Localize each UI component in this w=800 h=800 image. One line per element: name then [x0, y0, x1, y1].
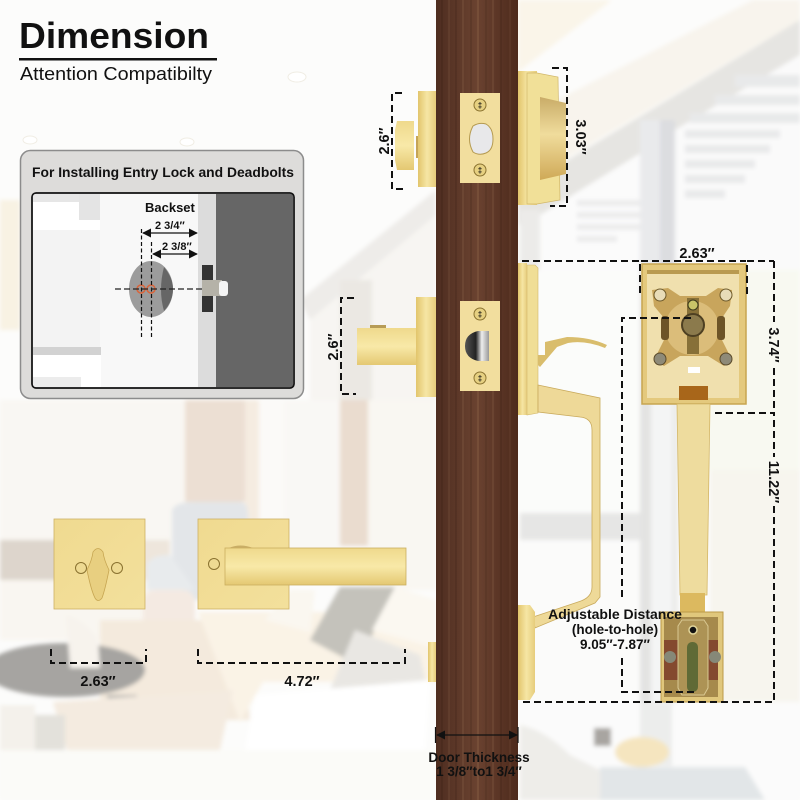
ceiling details: [288, 72, 306, 82]
adjustable distance label: (hole-to-hole): [572, 622, 658, 637]
subtitle: Attention Compatibilty: [20, 64, 212, 84]
dimension: 2 3/8: [152, 241, 197, 339]
handleset side view: [428, 263, 607, 700]
dimension: 3.74: 3.74″: [765, 327, 781, 363]
square deadbolt thumbturn front view: [54, 519, 145, 609]
dimension: thumbturn width: [51, 649, 146, 690]
dimension: 2 3/4: 2 3/4″: [155, 220, 185, 232]
backset label: Backset: [145, 200, 196, 215]
adjustable distance label: Adjustable Distance: [548, 606, 682, 622]
handleset front trim: back of plate: [642, 264, 746, 404]
strike plate top: ‡: [478, 166, 482, 175]
dimension: 3.03: [550, 68, 588, 206]
adjustable distance label: 9.05″-7.87″: [580, 637, 651, 652]
panel heading: For Installing Entry Lock and Deadbolts: [32, 165, 294, 180]
lower mounting plate: [661, 612, 723, 702]
dimension: 3.03: 3.03″: [572, 119, 588, 155]
handle bar: [677, 404, 710, 613]
dimension: door thickness: 1 3/8″to1 3/4″: [436, 764, 522, 779]
adjustable distance label: [548, 606, 682, 652]
lever side view: [357, 297, 436, 397]
dimension: lever length: [198, 649, 405, 690]
dimension: thumbturn width: 2.63″: [80, 674, 116, 690]
dimension: 2.63 trim width: 2.63″: [679, 246, 715, 262]
bore hole: [129, 261, 173, 317]
dimension: 2 3/4: [142, 220, 197, 338]
dimension: lever length: 4.72″: [284, 674, 320, 690]
door edge: wood: [436, 0, 518, 800]
dimension: 11.22: 11.22″: [765, 461, 781, 503]
dimension: door thickness: [428, 727, 530, 779]
dimension: lever 2.6: [326, 298, 356, 394]
latch plate: [460, 301, 500, 391]
strike plate top: ‡: [478, 101, 482, 110]
latch plate: ‡: [478, 374, 482, 383]
dimension: adjustable hole distance: [622, 318, 698, 692]
dimension: 11.22: [520, 413, 781, 702]
center line: [115, 288, 202, 290]
square lever front view: [198, 519, 406, 609]
deadbolt exterior cylinder: [518, 71, 566, 205]
title: Dimension: [19, 15, 209, 56]
dimension: 2 3/8: 2 3/8″: [162, 241, 192, 253]
latch: [202, 265, 228, 312]
dimension: deadbolt 2.6: 2.6″: [377, 127, 393, 155]
panel: backset installation: [20, 150, 304, 398]
deadbolt side view: interior thumbturn: [395, 91, 436, 187]
title underline: [19, 58, 217, 60]
door illustration: [32, 193, 294, 388]
dimension: door thickness: Door Thickness: [428, 750, 530, 765]
dimension: 2.63 trim width: [522, 246, 774, 294]
dimension: deadbolt 2.6: [377, 93, 404, 189]
latch plate: ‡: [478, 310, 482, 319]
strike plate top: [460, 93, 500, 183]
dimension: lever 2.6: 2.6″: [326, 333, 342, 361]
